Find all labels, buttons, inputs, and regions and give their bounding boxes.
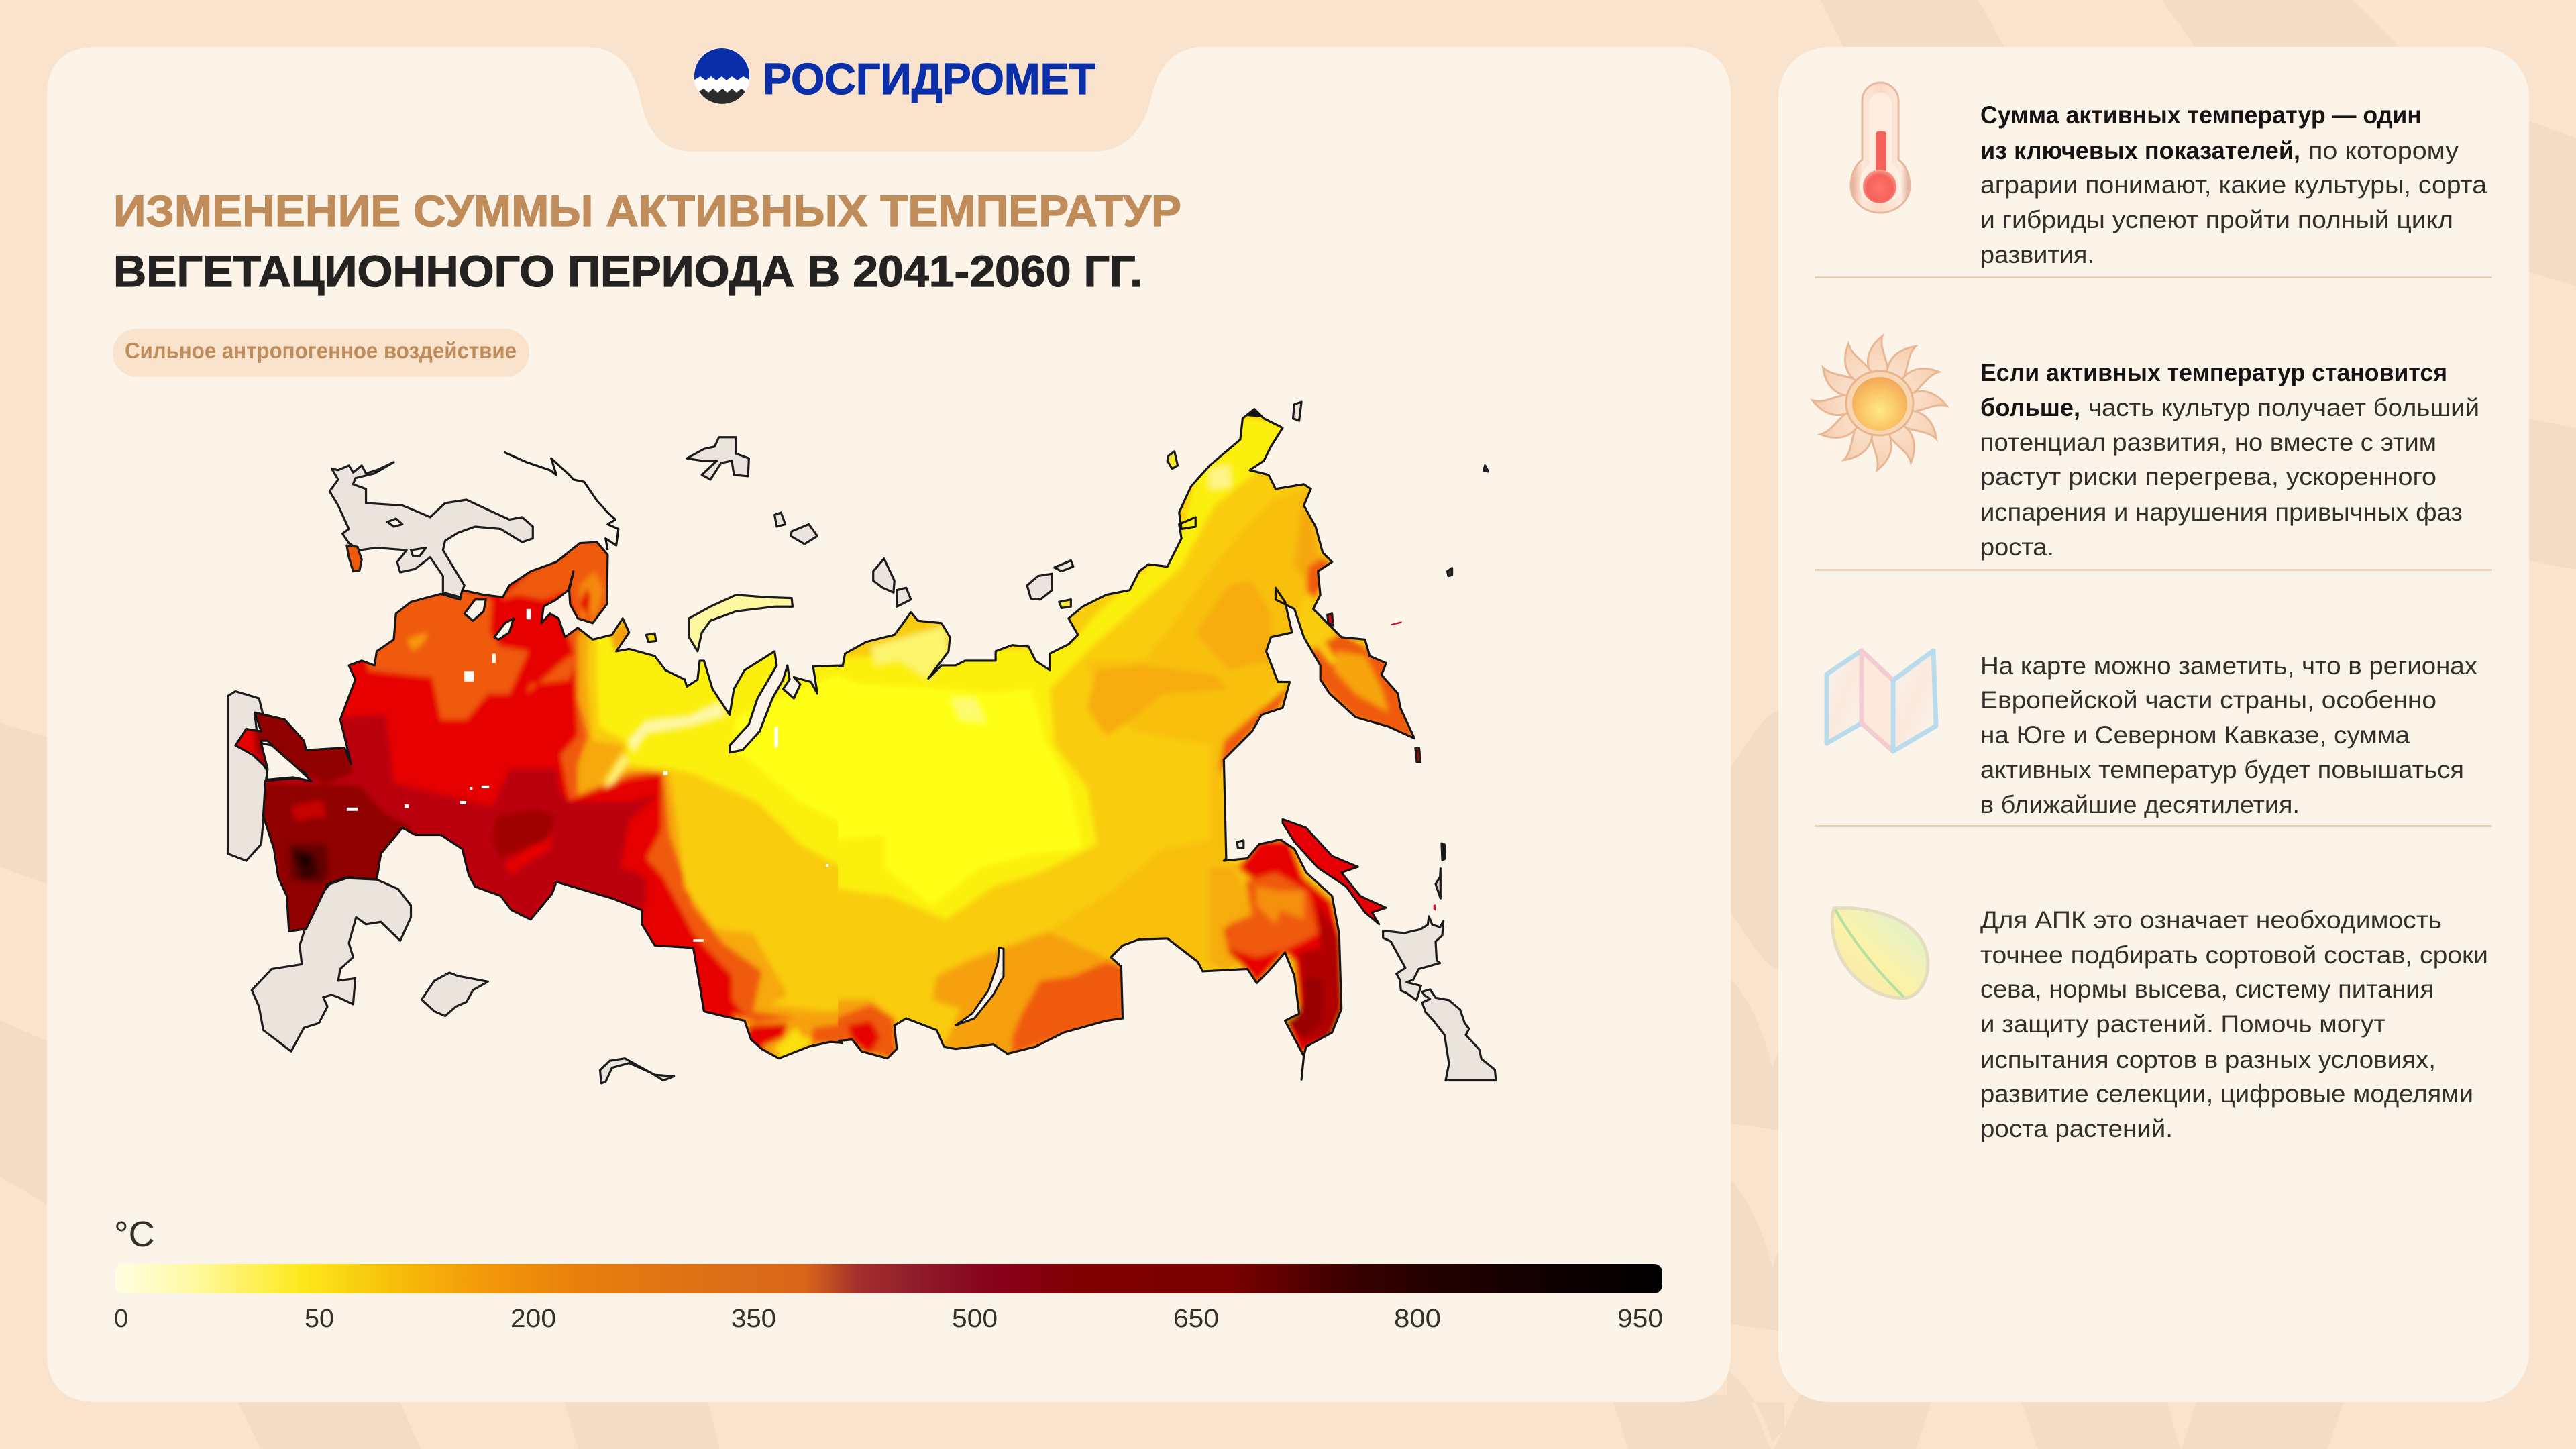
scale labels: 950: [1617, 1305, 1663, 1333]
icon: thermometer: [1851, 83, 1910, 213]
text: block 1: и гибриды успеют пройти полный цикл: [1980, 206, 2453, 233]
text: block 3: Европейской части страны, особенно: [1980, 686, 2436, 714]
west land temperature fill: [234, 541, 843, 1060]
unit label: °C: [114, 1214, 155, 1254]
icon: leaf: [1832, 908, 1928, 998]
text: block 2: [1980, 359, 2479, 561]
scale labels: 50: [305, 1305, 334, 1333]
panel: explanation card: [1778, 47, 2529, 1402]
scale labels: 800: [1394, 1305, 1441, 1333]
text: block 2: Если активных температур становится: [1980, 359, 2447, 386]
map of temperature change: [219, 388, 1496, 1084]
scale labels: 350: [731, 1305, 776, 1333]
west coastline: [235, 542, 843, 1059]
logo: [694, 48, 1095, 104]
text: block 2: часть культур получает больший: [2088, 394, 2479, 421]
icon: sun: [1813, 336, 1947, 470]
text: block 4: испытания сортов в разных условиях,: [1980, 1046, 2436, 1073]
logo wordmark: РОСГИДРОМЕТ: [763, 54, 1095, 103]
text: block 1: по которому: [2308, 137, 2459, 164]
text: block 3: активных температур будет повышаться: [1980, 756, 2464, 784]
text: block 4: развитие селекции, цифровые моделями: [1980, 1080, 2473, 1108]
gradient bar: [115, 1264, 1662, 1293]
text: block 3: [1980, 652, 2478, 818]
text: block 3: На карте можно заметить, что в регионах: [1980, 652, 2478, 680]
scenario tag: [113, 329, 529, 377]
lake Baikal: [955, 948, 1004, 1026]
neighbouring territories west: [228, 437, 817, 1083]
title line 1: ИЗМЕНЕНИЕ СУММЫ АКТИВНЫХ ТЕМПЕРАТУР: [113, 186, 1181, 235]
east coastline: [838, 409, 1414, 1079]
text: block 1: из ключевых показателей,: [1980, 137, 2300, 164]
black northern cape: [1247, 409, 1264, 417]
text: block 4: точнее подбирать сортовой состав, сроки: [1980, 941, 2488, 969]
scenario tag: Сильное антропогенное воздействие: [125, 338, 517, 363]
text: block 1: [1980, 101, 2487, 268]
text: block 1: Сумма активных температур — один: [1980, 101, 2422, 129]
scale labels: 0: [114, 1305, 128, 1333]
icon: folded map: [1827, 651, 1936, 751]
inland water holes: [261, 600, 514, 782]
title line 2: ВЕГЕТАЦИОННОГО ПЕРИОДА В 2041-2060 ГГ.: [113, 246, 1142, 296]
text: block 4: сева, нормы высева, систему питания: [1980, 975, 2434, 1003]
scale labels: 500: [952, 1305, 998, 1333]
text: block 2: больше,: [1980, 394, 2080, 421]
east land temperature fill: [837, 408, 1415, 1081]
text: block 2: потенциал развития, но вместе с этим: [1980, 429, 2436, 456]
text: block 1: развития.: [1980, 241, 2094, 268]
scale labels: 650: [1173, 1305, 1219, 1333]
text: block 2: растут риски перегрева, ускоренного: [1980, 463, 2436, 490]
scale labels: [114, 1305, 1663, 1333]
text: block 1: аграрии понимают, какие культуры, сорта: [1980, 171, 2487, 199]
legend colour scale: [114, 1214, 1663, 1333]
text: block 2: роста.: [1980, 533, 2054, 561]
title: [113, 186, 1181, 296]
text: block 3: на Юге и Северном Кавказе, сумма: [1980, 721, 2410, 749]
scale labels: 200: [511, 1305, 556, 1333]
icon: logo emblem: [694, 48, 750, 104]
text: block 4: [1980, 906, 2488, 1142]
text: block 4: Для АПК это означает необходимость: [1980, 906, 2442, 934]
unfilled northern coastline: [504, 452, 619, 550]
neighbouring territories east: [1383, 843, 1496, 1081]
text: block 3: в ближайшие десятилетия.: [1980, 791, 2300, 818]
Sakhalin: [1283, 819, 1386, 924]
panel: main map card: [47, 47, 1731, 1402]
text: block 4: и защиту растений. Помочь могут: [1980, 1010, 2385, 1038]
islands north east: [873, 402, 1489, 848]
text: block 4: роста растений.: [1980, 1115, 2173, 1142]
text: block 2: испарения и нарушения привычных фаз: [1980, 498, 2463, 526]
